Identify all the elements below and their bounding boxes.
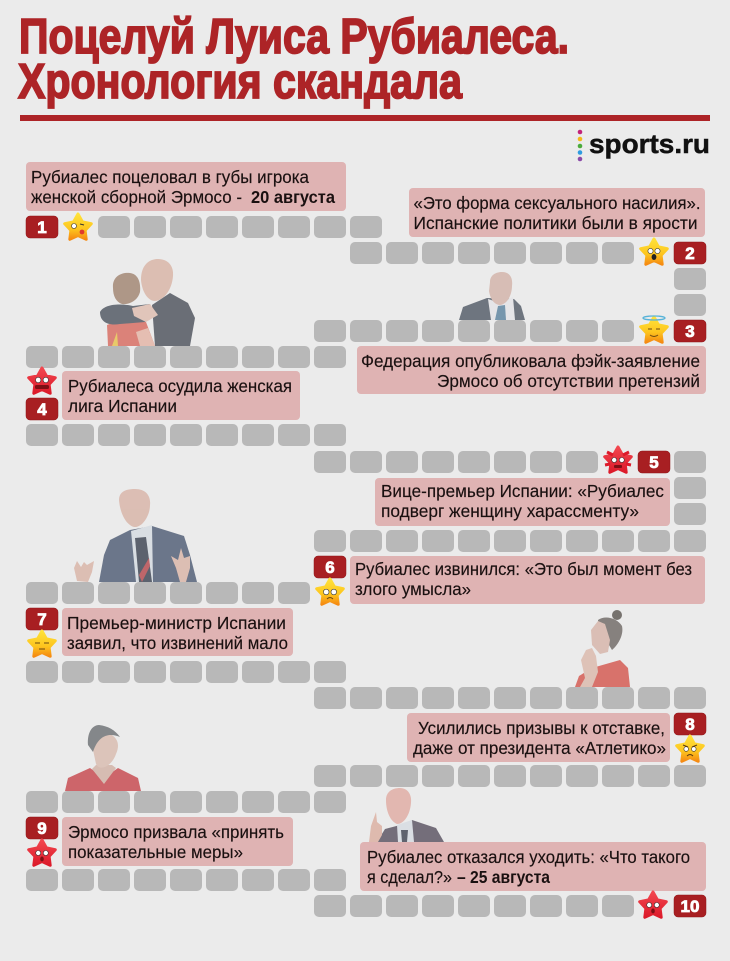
track row 3 xyxy=(314,320,634,342)
step 3 panel: Федерация опубликовала фэйк-заявление xyxy=(361,351,700,371)
track row 11 xyxy=(314,765,706,787)
track row 4 xyxy=(26,346,346,368)
step 5 panel xyxy=(375,478,670,526)
step 4 panel xyxy=(62,371,300,420)
step 3 panel: Эрмосо об отсутствии претензий xyxy=(437,371,700,391)
photo: Rubiales gesturing xyxy=(74,489,197,582)
step 1 star: kiss xyxy=(65,214,91,239)
step 9 panel: Эрмосо призвала «принять xyxy=(68,822,284,842)
step 10 panel: Рубиалес отказался уходить: «Что такого xyxy=(367,847,690,867)
photo: Rubiales pointing xyxy=(369,788,444,842)
step 5 star: spiky red xyxy=(605,447,631,472)
title: Хронология скандала xyxy=(18,55,463,109)
track side cells 2-3 xyxy=(674,268,706,316)
step 3 badge xyxy=(674,320,706,342)
track row 10 xyxy=(314,687,706,709)
step 1 panel: женской сборной Эрмосо - xyxy=(31,187,242,207)
step 6 panel: Рубиалес извинился: «Это был момент без xyxy=(355,559,692,579)
step 9 star: shocked red xyxy=(29,840,55,865)
step 3 panel xyxy=(357,346,706,394)
step 5 panel: Вице-премьер Испании: «Рубиалес xyxy=(381,481,664,501)
photo: the kiss xyxy=(100,259,195,346)
step 1 badge xyxy=(26,216,58,238)
track row 13 xyxy=(26,869,346,891)
step 4 star: angry red xyxy=(29,368,55,393)
step 3 badge: 3 xyxy=(685,322,695,341)
step 7 badge xyxy=(26,608,58,630)
step 10 panel: – 25 августа xyxy=(457,867,550,887)
title: Поцелуй Луиса Рубиалеса. xyxy=(19,10,569,64)
step 9 badge: 9 xyxy=(37,819,47,838)
step 7 star: calm xyxy=(29,631,55,656)
step 10 panel: я сделал?» xyxy=(367,867,452,887)
step 3 star: halo xyxy=(641,316,667,342)
step 1 panel: Рубиалес поцеловал в губы игрока xyxy=(31,167,309,187)
step 5 panel: подверг женщину харассменту» xyxy=(381,501,639,521)
step 5 badge xyxy=(638,451,670,473)
step 8 badge xyxy=(674,713,706,735)
photo: Hermoso xyxy=(65,725,141,791)
step 8 badge: 8 xyxy=(685,715,695,734)
step 8 panel: даже от президента «Атлетико» xyxy=(413,738,666,758)
step 2 badge xyxy=(674,242,706,264)
track row 12 xyxy=(26,791,346,813)
step 9 panel: показательные меры» xyxy=(68,842,243,862)
title rule xyxy=(20,115,710,121)
track row 9 xyxy=(26,661,346,683)
step 9 badge xyxy=(26,817,58,839)
step 6 badge xyxy=(314,556,346,578)
step 8 star: angry xyxy=(677,736,703,761)
step 2 panel: Испанские политики были в ярости xyxy=(414,213,698,233)
step 10 star: shocked red xyxy=(640,892,666,917)
photo: Rubiales profile xyxy=(459,272,525,320)
step 1 panel: 20 августа xyxy=(251,187,335,207)
step 5 badge: 5 xyxy=(649,453,659,472)
step 7 panel: Премьер-министр Испании xyxy=(67,613,286,633)
track side cells 5 xyxy=(674,451,706,525)
step 1 badge: 1 xyxy=(37,218,47,237)
step 2 panel: «Это форма сексуального насилия». xyxy=(414,193,700,213)
photo: player covering mouth xyxy=(575,610,630,687)
track row 2 xyxy=(350,242,634,264)
track row 5 xyxy=(26,424,346,446)
step 10 badge: 10 xyxy=(681,897,699,916)
step 10 badge xyxy=(674,895,706,917)
step 4 badge xyxy=(26,398,58,420)
track row 1 xyxy=(98,216,382,238)
step 6 star: worried xyxy=(317,579,343,604)
track row 7 xyxy=(314,530,706,552)
step 2 star: shocked xyxy=(641,239,667,264)
track row 6 xyxy=(314,451,598,473)
step 4 badge: 4 xyxy=(37,400,47,419)
step 7 panel xyxy=(62,608,293,656)
step 8 panel xyxy=(407,713,670,762)
logo: sports.ru: sports.ru xyxy=(589,129,710,159)
step 4 panel: лига Испании xyxy=(68,396,177,416)
step 7 badge: 7 xyxy=(37,610,47,629)
step 10 panel xyxy=(360,842,706,891)
step 2 panel xyxy=(409,188,705,237)
step 6 panel xyxy=(350,556,705,604)
step 9 panel xyxy=(62,817,293,866)
step 1 panel xyxy=(26,162,346,211)
track row 8 xyxy=(26,582,310,604)
step 8 panel: Усилились призывы к отставке, xyxy=(418,718,665,738)
track row 14 xyxy=(314,895,634,917)
title xyxy=(18,10,569,109)
step 6 badge: 6 xyxy=(325,558,335,577)
step 7 panel: заявил, что извинений мало xyxy=(67,633,288,653)
step 6 panel: злого умысла» xyxy=(355,579,471,599)
step 2 badge: 2 xyxy=(685,244,695,263)
step 4 panel: Рубиалеса осудила женская xyxy=(68,376,292,396)
